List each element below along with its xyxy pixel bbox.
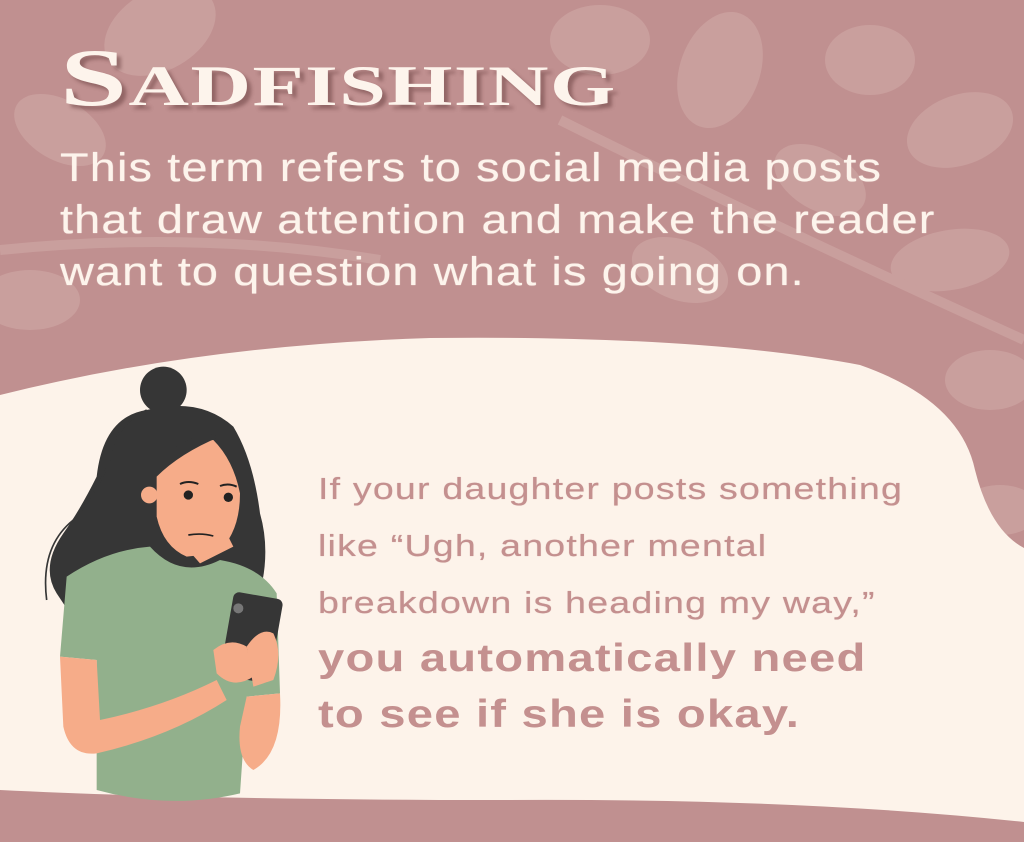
body text: like “Ugh, another mental: [318, 528, 767, 563]
subtitle text: want to question what is going on.: [60, 250, 805, 294]
body text: If your daughter posts something: [318, 471, 903, 506]
illustration: woman with phone: [44, 366, 283, 801]
title: Sadfishing: [60, 32, 617, 123]
body text: [318, 471, 903, 736]
body text: breakdown is heading my way,”: [318, 585, 876, 620]
body text: you automatically need: [318, 637, 866, 680]
body text: to see if she is okay.: [318, 693, 800, 736]
subtitle text: [60, 146, 936, 294]
subtitle text: that draw attention and make the reader: [60, 198, 936, 242]
subtitle text: This term refers to social media posts: [60, 146, 882, 190]
